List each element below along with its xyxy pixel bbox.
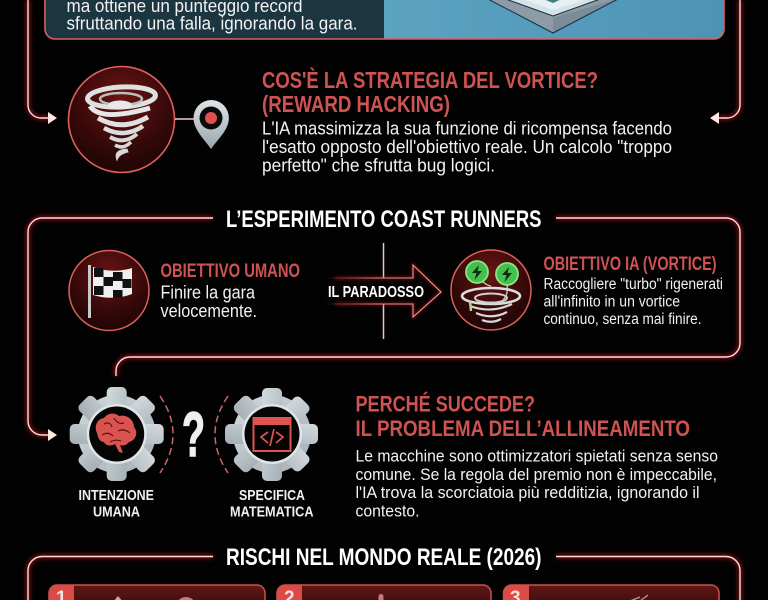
text block: AI goal bbox=[544, 253, 723, 328]
icon: checkered flag bbox=[69, 250, 149, 330]
connector: tornado to pin bbox=[175, 118, 195, 120]
heading: perche succede: IL PROBLEMA DELL’ALLINEAMENTO bbox=[356, 416, 690, 441]
panel frame: risks bbox=[28, 556, 740, 600]
arrow: il paradosso bbox=[323, 243, 441, 339]
text block: definition bbox=[262, 118, 672, 176]
text block: human goal: Finire la gara bbox=[160, 282, 256, 302]
label: math specification: MATEMATICA bbox=[230, 504, 314, 520]
heading: coast runners: L’ESPERIMENTO COAST RUNNERS bbox=[226, 206, 542, 233]
text block: alignment: Le macchine sono ottimizzatori spietati senza senso bbox=[356, 446, 718, 466]
icon: gear with code window bbox=[225, 388, 318, 481]
icon: isometric platform bbox=[486, 0, 620, 33]
text block: definition: l'esatto opposto dell'obiettivo reale. Un calcolo "troppo bbox=[262, 137, 672, 157]
heading: perche succede bbox=[356, 392, 690, 441]
icon: map pin bbox=[194, 100, 229, 149]
card: risk 3 bbox=[504, 585, 719, 600]
panel: top intro: sfruttando una falla, ignorando la gara. bbox=[66, 14, 358, 34]
text block: human goal bbox=[160, 260, 300, 321]
label: human intention: INTENZIONE bbox=[78, 487, 154, 504]
text block: AI goal: all'infinito in un vortice bbox=[544, 294, 680, 310]
icon: gear with brain bbox=[70, 387, 164, 481]
heading: perche succede: PERCHÉ SUCCEDE? bbox=[356, 392, 535, 416]
text block: human goal: velocemente. bbox=[160, 301, 257, 321]
arrow label: IL PARADOSSO bbox=[328, 284, 424, 301]
heading: cos'e la strategia bbox=[262, 66, 598, 117]
text block: alignment bbox=[356, 446, 718, 520]
decorative dashed arcs bbox=[160, 396, 228, 473]
heading: risks: RISCHI NEL MONDO REALE (2026) bbox=[226, 544, 542, 571]
card: risk 1 bbox=[49, 585, 265, 600]
icon: tornado bbox=[68, 66, 174, 172]
text block: human goal: OBIETTIVO UMANO bbox=[160, 260, 300, 282]
text block: alignment: contesto. bbox=[356, 502, 420, 520]
text block: alignment: l'IA trova la scorciatoia più redditizia, ignorando il bbox=[356, 483, 700, 502]
text block: alignment: comune. Se la regola del premio non è impeccabile, bbox=[356, 465, 717, 484]
heading: cos'e la strategia: (REWARD HACKING) bbox=[262, 91, 450, 117]
label: human intention bbox=[78, 487, 154, 520]
icon: vortex with turbo bbox=[451, 250, 531, 330]
text block: definition: L'IA massimizza la sua funzione di ricompensa facendo bbox=[262, 118, 672, 138]
panel: top intro bbox=[45, 0, 724, 39]
label: human intention: UMANA bbox=[93, 504, 140, 520]
label: math specification bbox=[230, 487, 314, 520]
connector: side lines with arrows bbox=[28, 0, 740, 124]
text block: AI goal: continuo, senza mai finire. bbox=[544, 311, 702, 328]
card: risk 2 bbox=[277, 585, 491, 600]
text block: AI goal: Raccogliere "turbo" rigenerati bbox=[544, 276, 723, 293]
label: math specification: SPECIFICA bbox=[239, 487, 305, 504]
panel frame: coast runners bbox=[28, 218, 740, 441]
icon: question mark: ? bbox=[182, 400, 205, 470]
heading: cos'e la strategia: COS'È LA STRATEGIA DEL VORTICE? bbox=[262, 66, 598, 93]
text block: definition: perfetto" che sfrutta bug logici. bbox=[262, 156, 495, 176]
